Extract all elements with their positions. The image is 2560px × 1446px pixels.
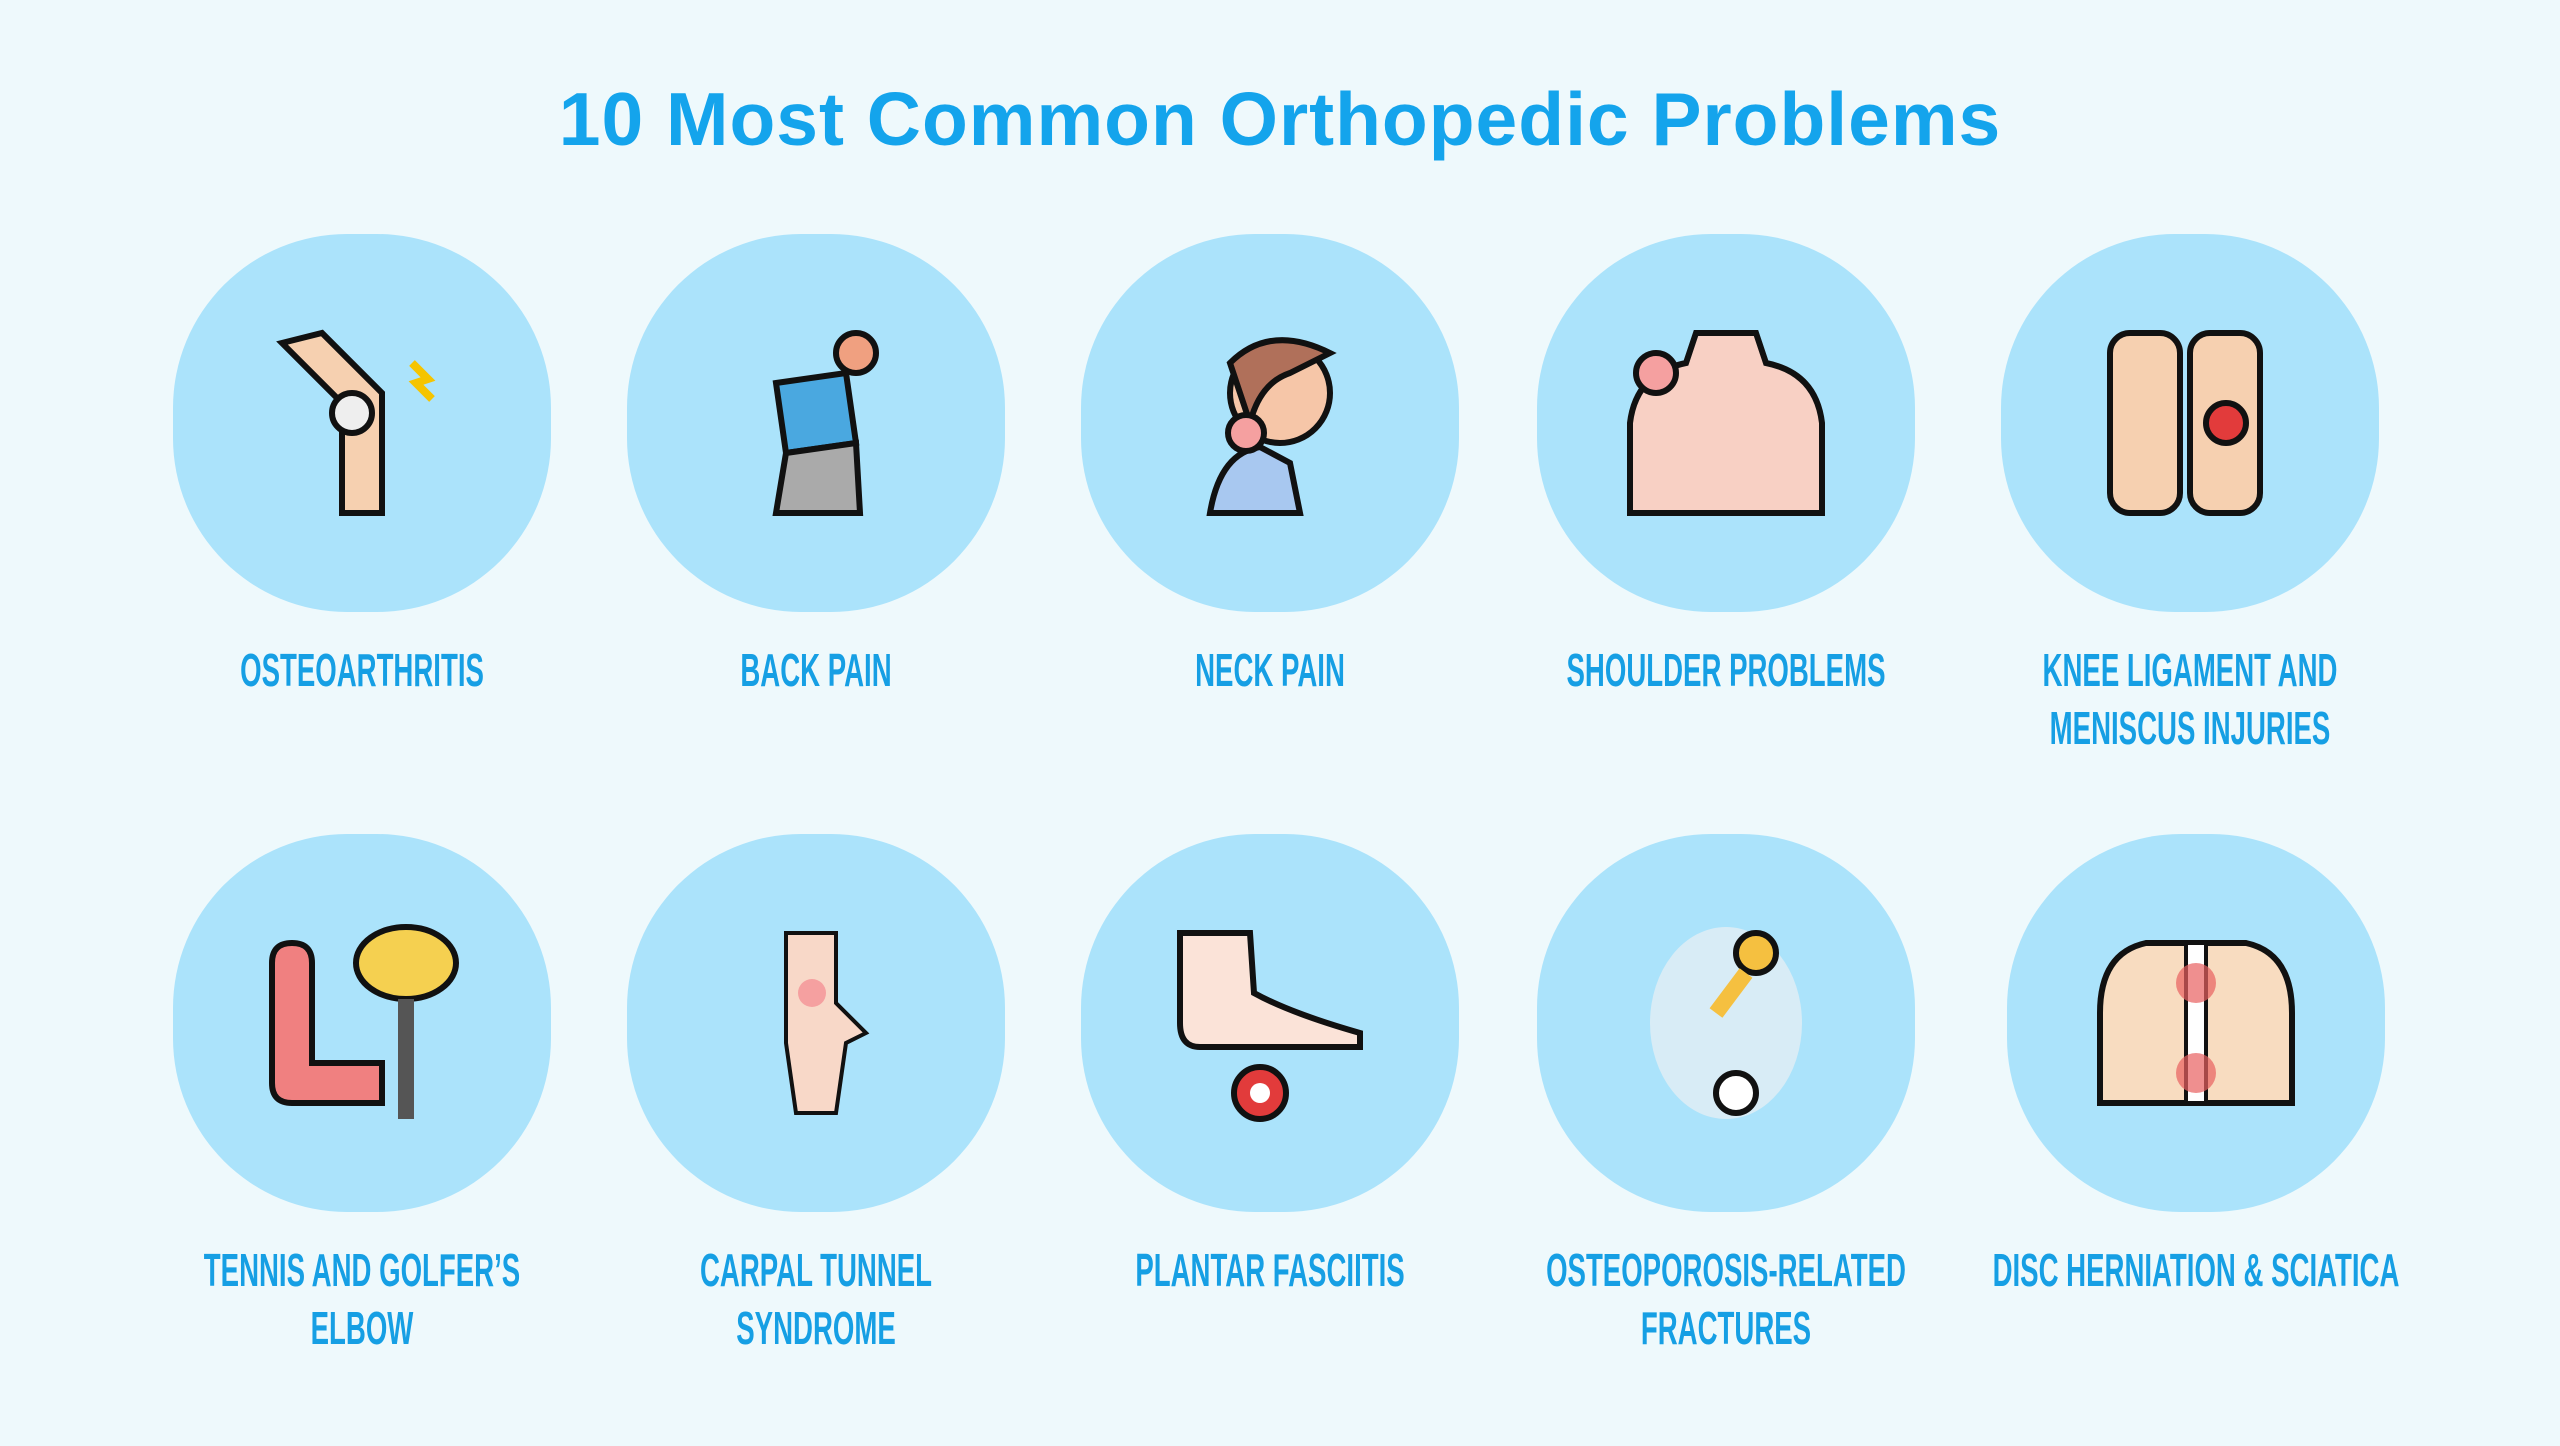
label: tennis elbow: TENNIS AND GOLFER’S (204, 1244, 520, 1296)
panel: knee (2001, 234, 2379, 612)
label: tennis elbow (204, 1244, 520, 1354)
panel: neck pain (1081, 234, 1459, 612)
label: osteoporosis fractures: OSTEOPOROSIS-RELATED (1546, 1244, 1906, 1296)
label: disc herniation: DISC HERNIATION & SCIATICA (1993, 1244, 2399, 1296)
label: knee (2043, 644, 2337, 754)
label: osteoporosis fractures: FRACTURES (1641, 1302, 1811, 1354)
label: plantar fasciitis: PLANTAR FASCIITIS (1135, 1244, 1405, 1296)
label: back pain: BACK PAIN (740, 644, 892, 696)
label: carpal tunnel: CARPAL TUNNEL (700, 1244, 932, 1296)
label: shoulder problems: SHOULDER PROBLEMS (1567, 644, 1885, 696)
label: tennis elbow: ELBOW (311, 1302, 413, 1354)
label: osteoporosis fractures (1546, 1244, 1906, 1354)
label: carpal tunnel: SYNDROME (736, 1302, 896, 1354)
label: carpal tunnel (700, 1244, 932, 1354)
panel: back pain (627, 234, 1005, 612)
label: osteoarthritis: OSTEOARTHRITIS (240, 644, 484, 696)
panel: carpal tunnel (627, 834, 1005, 1212)
panel: plantar fasciitis (1081, 834, 1459, 1212)
title: 10 Most Common Orthopedic Problems (559, 77, 2001, 161)
panel: shoulder problems (1537, 234, 1915, 612)
panel: disc herniation (2007, 834, 2385, 1212)
label: knee: MENISCUS INJURIES (2050, 702, 2330, 754)
panel: osteoporosis fractures (1537, 834, 1915, 1212)
panel: osteoarthritis (173, 234, 551, 612)
panel: tennis elbow (173, 834, 551, 1212)
label: neck pain: NECK PAIN (1195, 644, 1345, 696)
label: knee: KNEE LIGAMENT AND (2043, 644, 2337, 696)
